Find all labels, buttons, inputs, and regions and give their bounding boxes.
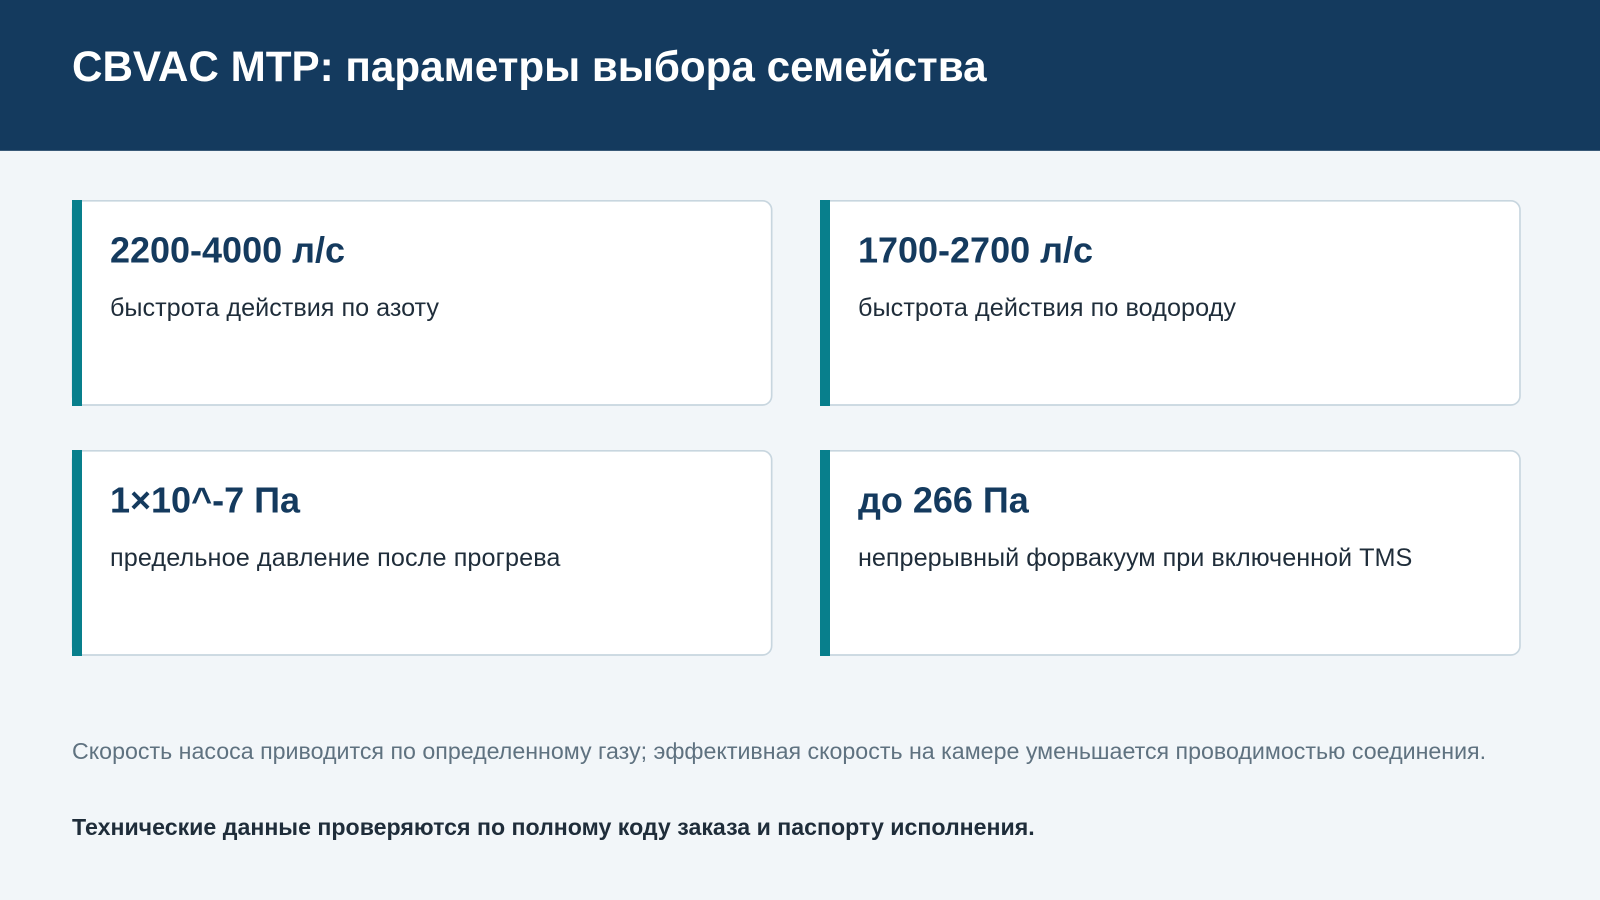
card: ultimate pressure (72, 450, 772, 656)
accent bar: nitrogen card (72, 200, 82, 406)
bold footer note: Технические данные проверяются по полному коду заказа и паспорту исполнения. (72, 814, 1035, 840)
value: nitrogen speed: 2200-4000 л/с (110, 230, 345, 270)
value: foreline pressure: до 266 Па (858, 480, 1029, 520)
accent bar: ultimate pressure card (72, 450, 82, 656)
value: ultimate pressure: 1×10^-7 Па (110, 480, 300, 520)
description: nitrogen speed: быстрота действия по азоту (110, 294, 439, 321)
description: ultimate pressure: предельное давление после прогрева (110, 544, 561, 571)
description: foreline pressure: непрерывный форвакуум при включенной TMS (858, 544, 1412, 571)
header band (0, 0, 1600, 151)
accent bar: foreline pressure card (820, 450, 830, 656)
card: hydrogen pumping speed (820, 200, 1520, 406)
description: hydrogen speed: быстрота действия по водороду (858, 294, 1236, 321)
value: hydrogen speed: 1700-2700 л/с (858, 230, 1093, 270)
note text: Скорость насоса приводится по определенному газу; эффективная скорость на камере уменьшается проводимостью соединения. (72, 739, 1486, 764)
card: foreline pressure (820, 450, 1520, 656)
accent bar: hydrogen card (820, 200, 830, 406)
card: nitrogen pumping speed (72, 200, 772, 406)
title: CBVAC MTP: параметры выбора семейства (72, 42, 987, 90)
